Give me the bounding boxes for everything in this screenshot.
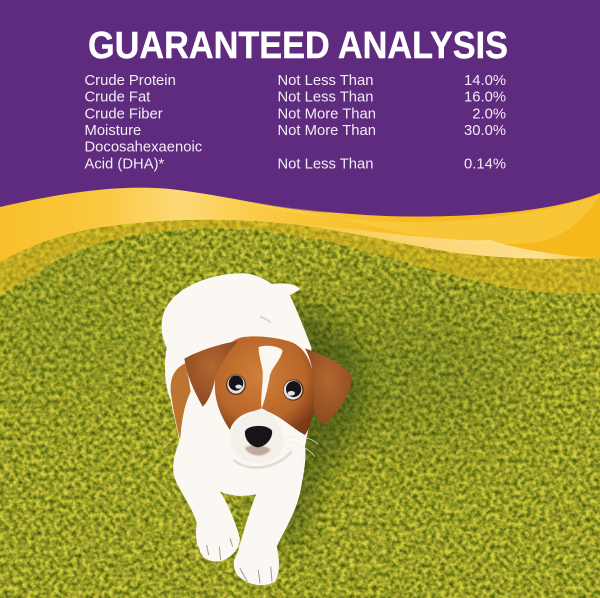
pale ribbon wave	[290, 224, 600, 259]
row: moisture: Moisture	[84, 123, 141, 139]
row: crude protein	[84, 73, 506, 89]
purple header panel	[0, 0, 600, 217]
whiskers	[282, 437, 318, 462]
row: crude fiber: 2.0%	[472, 106, 506, 122]
row: crude fat: Crude Fat	[84, 90, 150, 106]
puppy photo illustration	[162, 273, 352, 585]
tan flank patch	[171, 363, 191, 440]
lighter highlight wave	[225, 195, 600, 244]
mauve accent along wave	[245, 201, 345, 213]
row: DHA: Acid (DHA)*	[84, 156, 164, 172]
row: moisture	[84, 123, 506, 139]
row: crude fiber	[84, 106, 506, 122]
right eye	[283, 379, 304, 401]
row: crude protein: Crude Protein	[84, 73, 176, 89]
puppy body	[162, 273, 313, 585]
row: crude fat	[84, 90, 506, 106]
nose	[245, 426, 272, 447]
row: crude protein: Not Less Than	[278, 73, 373, 89]
white blaze	[259, 346, 283, 408]
row: crude fiber: Not More Than	[278, 106, 376, 122]
puppy head fur	[215, 336, 314, 435]
row: DHA: 0.14%	[464, 156, 506, 172]
carpet background	[0, 170, 600, 598]
row: crude fat: 16.0%	[464, 90, 506, 106]
right ear	[305, 348, 352, 425]
row: moisture: 30.0%	[464, 123, 506, 139]
row: DHA: Not Less Than	[278, 156, 373, 172]
left eye	[226, 374, 246, 395]
solid yellow wave	[0, 170, 600, 262]
mouth shade	[245, 445, 271, 455]
guaranteed analysis table	[84, 73, 506, 172]
row: DHA: Docosahexaenoic	[84, 140, 203, 156]
row: crude fat: Not Less Than	[278, 90, 373, 106]
chin shadow	[233, 452, 292, 468]
dog shadow on carpet	[250, 290, 366, 560]
title: GUARANTEED ANALYSIS	[88, 25, 508, 67]
white muzzle	[230, 408, 283, 464]
left ear	[184, 341, 238, 407]
row: crude protein: 14.0%	[464, 73, 506, 89]
body shading	[260, 317, 271, 323]
row: crude fiber: Crude Fiber	[84, 106, 163, 122]
paw toes	[198, 538, 272, 583]
row: DHA	[84, 140, 506, 172]
translucent yellow wave over carpet	[0, 170, 600, 297]
row: moisture: Not More Than	[278, 123, 376, 139]
